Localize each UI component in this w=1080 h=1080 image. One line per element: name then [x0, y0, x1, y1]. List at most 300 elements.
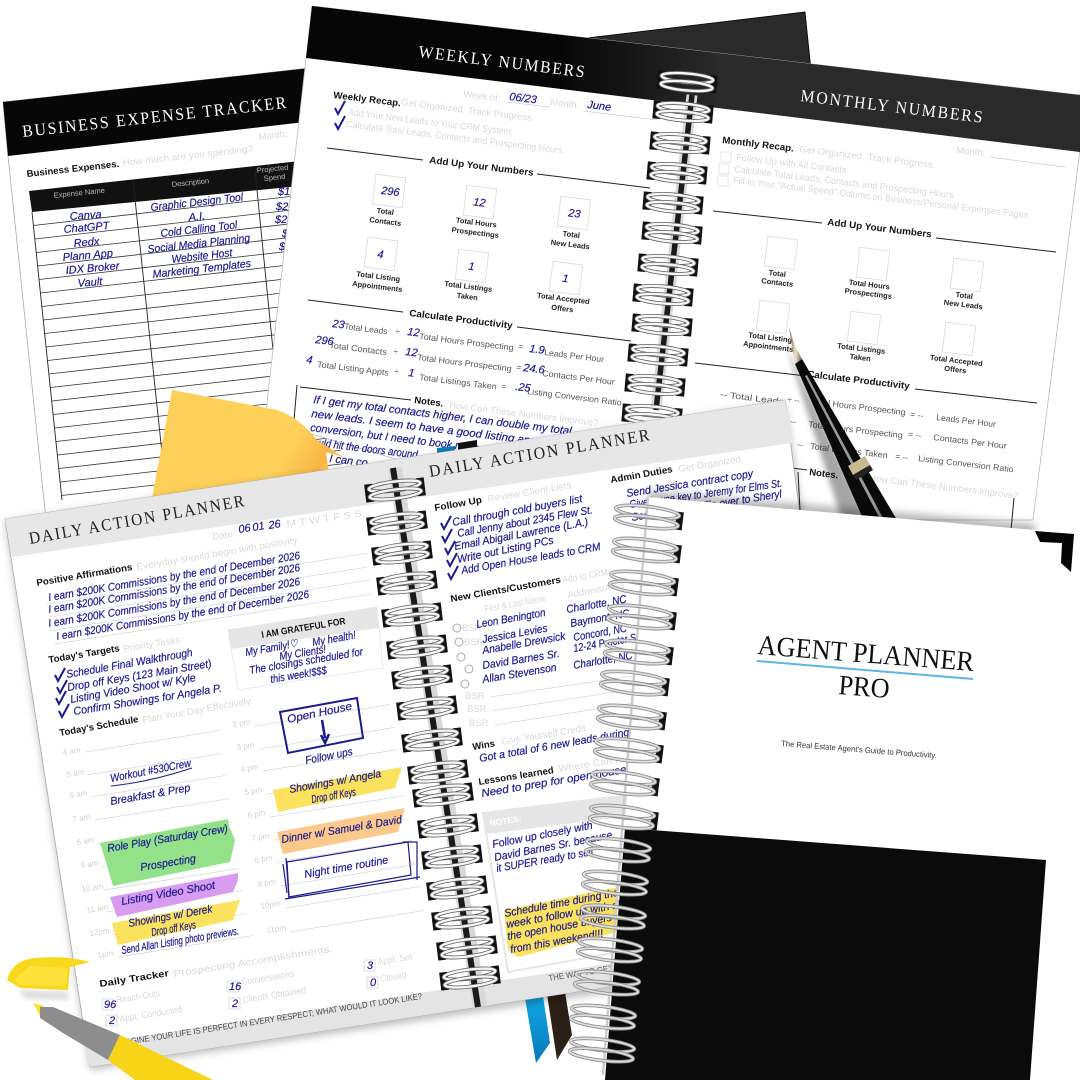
grateful box: My Clients! — [279, 644, 327, 663]
panel: cover — [569, 491, 1080, 1080]
monthly calculate productivity: Total Hours Prospecting — [811, 396, 907, 417]
weekly calculate productivity: Contacts Per Hour — [542, 368, 616, 387]
todays targets: Schedule Final Walkthrough — [65, 647, 194, 681]
monthly add up your numbers: Contacts — [761, 276, 794, 289]
date row: 26 — [267, 518, 282, 532]
todays targets: Priority Tasks. — [123, 634, 184, 655]
weekly calculate productivity: = — [518, 341, 524, 352]
new clients: Jessica Levies — [481, 623, 549, 646]
weekly notes: could hit the doors around — [308, 436, 419, 461]
todays schedule: 9 am — [80, 858, 99, 870]
date row: 06 — [238, 522, 252, 536]
monthly add up your numbers: Total — [955, 290, 973, 301]
weekly add up your numbers: 23 — [567, 207, 582, 221]
todays schedule: 7 pm — [251, 831, 270, 843]
todays targets: Drop off Keys (123 Main Street) — [67, 658, 213, 694]
monthly add up your numbers: Total Hours — [848, 278, 890, 291]
monthly calculate productivity: -- — [790, 416, 797, 427]
notes box: from this weekend!!! — [509, 928, 604, 956]
todays schedule: Showings w/ Derek — [127, 903, 214, 930]
monthly calculate productivity: -- — [797, 439, 804, 450]
daily tracker: 96 — [104, 999, 117, 1011]
table: $20 — [275, 201, 295, 213]
positive affirmations: I earn $200K Commissions by the end of December 2026 — [48, 550, 302, 604]
todays schedule: Breakfast & Prep — [109, 782, 191, 808]
new clients: Charlotte, NC — [565, 594, 628, 616]
weekly calculate productivity: Total Hours Prospecting — [419, 331, 515, 353]
table: Graphic Design Tool — [150, 191, 244, 214]
monthly add up your numbers: Add Up Your Numbers — [827, 217, 932, 240]
weekly calculate productivity: = — [516, 362, 522, 373]
notes box — [483, 795, 630, 983]
todays schedule: Follow ups — [304, 746, 354, 767]
todays schedule: Today's Schedule — [59, 714, 139, 739]
daily tracker: Conversations — [241, 969, 295, 988]
back sheet behind spread — [570, 12, 811, 70]
monthly calculate productivity: = -- — [895, 451, 909, 463]
grateful box: I AM GRATEFUL FOR — [261, 616, 346, 641]
new clients: Add to CRM — [562, 567, 609, 586]
wins and lessons: Give Yourself Credit. — [501, 723, 589, 748]
weekly add up your numbers: Add Up Your Numbers — [429, 155, 534, 179]
cover title: AGENT PLANNER — [756, 630, 976, 678]
monthly calculate productivity: Leads Per Hour — [936, 412, 997, 429]
weekly calculate productivity: Total Listing Appts — [317, 359, 389, 378]
table: $5 — [281, 228, 295, 240]
table: Expense Name — [53, 186, 105, 200]
table: $20 — [274, 214, 294, 226]
todays schedule: 10 am — [81, 882, 105, 894]
todays schedule: 2 pm — [232, 717, 251, 729]
weekly calculate productivity: 12 — [405, 346, 418, 359]
table: Description — [171, 176, 210, 189]
weekly recap block: Calculate Total Leads, Contacts and Prospecting Hours. — [346, 119, 565, 157]
positive affirmations: I earn $200K Commissions by the end of December 2026 — [48, 562, 302, 616]
footer band — [85, 965, 620, 1067]
notes box: it SUPER ready to sell — [495, 846, 595, 875]
sticky note — [148, 390, 345, 520]
monthly recap block: Get Organized. Track Progress. — [799, 144, 936, 171]
todays schedule: 8 am — [76, 835, 95, 847]
monthly calculate productivity: ÷ -- — [787, 394, 801, 406]
new clients: Leon Benington — [475, 607, 546, 631]
panel: business expense tracker — [3, 68, 342, 520]
monthly calculate productivity: -- Total Leads — [720, 389, 784, 407]
new clients: BSR — [469, 718, 489, 729]
todays schedule: Listing Video Shoot — [120, 879, 217, 908]
weekly calculate productivity: 296 — [314, 334, 335, 348]
new clients: Address/Area — [567, 580, 626, 601]
weekly calculate productivity: Total Listings Taken — [419, 372, 498, 392]
weekly add up your numbers: Prospectings — [451, 225, 499, 240]
weekly notes: new leads. I seem to have a good listing appt — [311, 408, 541, 448]
monthly add up your numbers: Total Accepted — [929, 353, 984, 368]
weekly calculate productivity: Total Hours Prospecting — [417, 352, 513, 374]
monthly add up your numbers: Offers — [944, 364, 967, 375]
weekly calculate productivity: .25 — [515, 381, 532, 395]
icon: arrow — [321, 720, 329, 743]
todays schedule — [59, 696, 424, 960]
follow up list: Call Jenny about 2345 Flew St. — [456, 504, 593, 540]
todays schedule: 9 pm — [257, 877, 276, 889]
ribbon bookmarks — [437, 440, 763, 1063]
spine — [656, 95, 692, 410]
new clients: BSR — [462, 623, 482, 634]
weekly add up your numbers: Offers — [551, 303, 574, 314]
todays targets: Listing Video Shoot w/ Kyle — [69, 672, 197, 706]
table: $9 — [278, 241, 291, 253]
todays schedule: 8 pm — [254, 853, 273, 865]
todays schedule: Role Play (Saturday Crew) — [107, 823, 229, 855]
weekly add up your numbers: Total — [562, 229, 580, 240]
spiral binding: cover — [569, 503, 684, 1064]
monthly calculate productivity: Total Hours Prospecting — [808, 419, 904, 440]
highlighter body — [108, 1035, 213, 1080]
monthly recap block: Month: — [956, 145, 986, 159]
notes box: Follow up closely with — [491, 820, 594, 851]
grateful box: The closings scheduled for — [249, 646, 365, 677]
daily tracker: Clients Obtained — [242, 985, 307, 1006]
todays schedule: 12pm — [89, 926, 110, 938]
heading: weekly numbers: WEEKLY NUMBERS — [418, 42, 588, 82]
admin duties: Get Organized. — [678, 454, 745, 475]
grateful box: this week!$$$ — [270, 665, 328, 686]
positive affirmations: Positive Affirmations — [36, 562, 133, 589]
monthly add up your numbers: Total — [768, 268, 786, 279]
new clients: 12-24 Proctor St — [572, 632, 640, 655]
weekly add up your numbers: 1 — [468, 261, 475, 273]
weekly calculate productivity: ÷ — [393, 346, 399, 357]
weekly recap block: Get Organized. Track Progress. — [401, 97, 535, 124]
cover subtitle word: PRO — [837, 670, 891, 705]
icon: pen — [786, 327, 897, 530]
open house box — [280, 698, 363, 753]
daily tracker: Reach Outs — [116, 988, 161, 1006]
daily tracker: Prospecting Accomplishments. — [173, 944, 333, 980]
month label: Month: — [258, 129, 288, 143]
monthly calculate productivity: = -- — [910, 409, 924, 421]
weekly calculate productivity: 4 — [306, 354, 313, 367]
monthly calculate productivity: Contacts Per Hour — [933, 432, 1008, 451]
weekly add up your numbers: Total Listings — [444, 279, 493, 294]
footer quote: IMAGINE YOUR LIFE IS PERFECT IN EVERY RESPECT; WHAT WOULD IT LOOK LIKE? — [117, 991, 423, 1048]
weekly add up your numbers: Taken — [456, 291, 479, 302]
table: Canva — [69, 209, 102, 223]
new clients: David Barnes Sr. — [482, 648, 561, 672]
daily tracker — [99, 944, 413, 1027]
weekly calculate productivity: 24.6 — [522, 362, 546, 377]
daily tracker: 2 — [108, 1015, 115, 1027]
header band — [3, 68, 310, 156]
notes box: NOTES: — [489, 814, 522, 828]
daily tracker: Appt. Conducted — [119, 1004, 183, 1025]
highlight: green — [100, 819, 235, 886]
todays schedule: 6 pm — [247, 808, 266, 820]
grateful box — [228, 607, 383, 690]
weekly add up your numbers: Total Accepted — [536, 291, 591, 306]
todays schedule: 11pm — [266, 923, 287, 935]
date row: M T W T F S S — [286, 509, 363, 530]
follow up list — [434, 480, 602, 579]
wins and lessons: Need to prep for open house — [481, 764, 627, 800]
positive affirmations: I earn $200K Commissions by the end of December 2026 — [56, 589, 311, 643]
highlight: yellow angela — [273, 767, 402, 812]
icon: highlighter — [7, 957, 213, 1080]
notes box: week to follow up with all — [505, 899, 624, 931]
weekly add up your numbers: 296 — [380, 185, 401, 199]
panel: daily action planner — [5, 400, 802, 1070]
heading: daily action planner right: DAILY ACTION PLANNER — [428, 425, 653, 481]
daily tracker: 0 — [370, 977, 377, 989]
todays targets: Today's Targets — [48, 643, 121, 666]
table: Redx — [73, 236, 100, 250]
daily tracker: Appt. Set — [377, 952, 413, 968]
weekly calculate productivity: Calculate Productivity — [409, 308, 514, 332]
daily tracker: 3 — [367, 960, 374, 972]
table: Cold Calling Tool — [160, 219, 238, 240]
weekly notes — [288, 385, 599, 490]
positive affirmations: Everyday should begin with positivity. — [136, 535, 300, 573]
todays schedule: Showings w/ Angela — [288, 768, 382, 796]
monthly add up your numbers: Prospectings — [844, 286, 892, 301]
weekly notes: If I get my total contacts higher, I can double my total — [313, 394, 573, 438]
monthly calculate productivity: Calculate Productivity — [807, 369, 911, 392]
todays schedule: 11 am — [86, 903, 109, 915]
todays schedule: 10pm — [260, 899, 281, 911]
weekly calculate productivity: 12 — [407, 326, 420, 339]
morning entries: Workout #530Crew — [109, 757, 193, 785]
weekly calculate productivity: ÷ — [395, 326, 401, 337]
todays schedule: 4 am — [62, 745, 81, 757]
weekly calculate productivity: Total Contacts — [329, 340, 388, 357]
daily tracker: 2 — [231, 998, 238, 1010]
monthly notes: How Can These Numbers Improve? — [869, 473, 1019, 502]
todays schedule: 4 pm — [240, 762, 259, 774]
monthly calculate productivity: = -- — [908, 429, 922, 441]
follow up list: Call through cold buyers list — [451, 493, 584, 529]
weekly recap block: Weekly Recap. — [333, 90, 401, 109]
weekly add up your numbers: 4 — [377, 249, 384, 261]
weekly recap block — [333, 89, 658, 157]
wins and lessons: Wins — [472, 738, 496, 753]
weekly calculate productivity: 1 — [408, 367, 415, 380]
highlighter nib — [33, 1003, 44, 1018]
table: A.I. — [187, 210, 206, 224]
weekly notes: conversion, but I need to book more — [310, 422, 480, 455]
weekly add up your numbers: Appointments — [352, 279, 403, 294]
todays schedule: Drop off Keys — [310, 786, 357, 806]
grateful box: My health! — [311, 629, 357, 649]
follow up list: Email Abigail Lawrence (L.A.) — [453, 516, 590, 553]
highlight: yellow derek — [112, 900, 240, 945]
weekly recap block: Week of: — [463, 89, 501, 105]
panel: weekly and monthly numbers spread — [265, 6, 1080, 530]
weekly recap block: Month: — [550, 97, 580, 112]
cover tagline: The Real Estate Agent's Guide to Productivity. — [781, 739, 937, 760]
wins and lessons: Got a total of 6 new leads during — [478, 727, 631, 765]
monthly notes: Notes. — [809, 467, 839, 481]
follow up list: Write out Listing PCs — [456, 535, 555, 566]
spine — [395, 468, 480, 1007]
admin duties: Send Jessica contract copy — [626, 468, 755, 500]
todays schedule: 3 pm — [236, 740, 255, 752]
todays targets: Confirm Showings for Angela P. — [73, 683, 223, 718]
monthly recap block: Follow Up with All Contacts — [736, 152, 847, 176]
todays schedule: 1pm — [97, 949, 114, 960]
new clients — [450, 567, 640, 729]
weekly notes: How Can These Numbers Improve? — [449, 400, 599, 429]
heading: monthly numbers: MONTHLY NUMBERS — [800, 86, 985, 127]
monthly recap block: Fill In Your "Actual Spend" Column on Business/Personal Expenses Pages — [733, 175, 1029, 221]
positive affirmations: I earn $200K Commissions by the end of December 2026 — [48, 576, 302, 630]
grateful box: My Family!♡ — [244, 638, 300, 659]
workout underline — [111, 768, 192, 786]
monthly add up your numbers: Total Listing — [748, 330, 793, 345]
spiral binding: daily planner — [364, 477, 501, 991]
wins and lessons — [472, 723, 631, 800]
header band — [306, 6, 1080, 152]
highlighter barrel grey — [40, 1007, 120, 1060]
heading: daily action planner left: DAILY ACTION PLANNER — [27, 491, 247, 548]
new clients: Concord, NC — [572, 623, 628, 644]
todays schedule: Plan Your Day Effectively. — [142, 696, 254, 726]
table: ChatGPT — [63, 220, 111, 236]
header band — [5, 400, 792, 557]
new clients: Baymont, NC — [569, 608, 631, 630]
new clients: Anabelle Drewsick — [481, 630, 567, 657]
daily tracker: Daily Tracker — [99, 968, 170, 990]
positive affirmations — [36, 535, 372, 644]
weekly calculate productivity: 1.9 — [529, 343, 545, 357]
admin duties: Give house key to Jeremy for Elms St. — [629, 478, 783, 511]
todays schedule: Open House — [286, 700, 353, 726]
admin duties: Admin Duties — [610, 464, 674, 486]
weekly recap block: 06/23 — [509, 91, 538, 106]
todays schedule: Prospecting — [140, 853, 198, 874]
cover title underline — [757, 661, 973, 679]
weekly add up your numbers: New Leads — [550, 238, 590, 251]
date row: Date: — [212, 529, 236, 543]
highlight: purple — [110, 873, 238, 917]
admin duties — [610, 454, 783, 524]
new clients: BSR — [465, 691, 485, 702]
monthly add up your numbers: Taken — [849, 352, 872, 363]
todays schedule: Send Allan Listing photo previews. — [121, 925, 240, 957]
todays schedule: Drop off Keys — [150, 919, 197, 939]
weekly add up your numbers: Contacts — [369, 215, 402, 228]
table: $12 — [277, 186, 296, 198]
todays schedule: Night time routine — [303, 854, 389, 881]
new clients: Charlotte, NC — [572, 650, 634, 672]
notes box: David Barnes Sr. because — [493, 829, 613, 864]
follow up list: Review Client Lists — [487, 480, 573, 505]
todays schedule: 7 am — [72, 812, 91, 824]
todays schedule: 5 pm — [244, 785, 263, 797]
weekly calculate productivity: Total Leads — [344, 321, 388, 336]
weekly recap block: June — [586, 99, 612, 114]
highlight: orange — [277, 808, 405, 854]
highlighter cap — [7, 957, 90, 990]
night routine box — [283, 842, 420, 899]
wins and lessons: Lessons learned — [478, 765, 555, 788]
cover black lower panel — [605, 828, 1046, 1080]
todays targets — [48, 634, 223, 718]
weekly calculate productivity: ÷ — [394, 366, 400, 377]
spiral binding: weekly spread — [621, 70, 718, 427]
new clients: BSR — [467, 704, 487, 715]
weekly add up your numbers: Total Hours — [455, 216, 497, 229]
wins and lessons: Where Can I — [558, 755, 619, 775]
monthly add up your numbers: Appointments — [743, 339, 794, 354]
highlight: yellow note — [504, 887, 618, 957]
weekly notes: Notes. — [414, 395, 444, 410]
section title: Business Expenses. — [26, 159, 120, 180]
table: Projected — [256, 163, 289, 175]
table: Website Host — [171, 247, 234, 266]
heading: business expense tracker: BUSINESS EXPENSE TRACKER — [21, 93, 289, 141]
weekly add up your numbers — [327, 148, 650, 314]
monthly recap block — [718, 135, 1065, 221]
weekly calculate productivity: Leads Per Hour — [544, 347, 605, 364]
weekly calculate productivity: = — [501, 381, 507, 392]
cover corner tab — [1035, 531, 1074, 572]
weekly add up your numbers: Total Listing — [356, 269, 401, 284]
follow up list: Follow Up — [434, 495, 483, 514]
new clients: Allan Stevenson — [481, 662, 557, 686]
todays schedule: 5 am — [66, 767, 85, 779]
date row — [212, 509, 363, 543]
weekly recap block: Add Your New Leads to Your CRM System. — [348, 107, 514, 138]
date row: 01 — [252, 520, 266, 534]
monthly add up your numbers: Total Listings — [837, 341, 886, 356]
monthly notes — [798, 467, 1019, 530]
admin duties: Send the Buyer file over to Sheryl — [631, 488, 783, 524]
section prompt: How much are you spending? — [122, 144, 254, 169]
table: Spend — [263, 172, 286, 183]
weekly calculate productivity: Listing Conversion Ratio — [527, 386, 623, 408]
weekly add up your numbers: 1 — [562, 273, 569, 285]
monthly add up your numbers: New Leads — [943, 298, 983, 311]
weekly add up your numbers: 12 — [473, 196, 486, 210]
monthly add up your numbers — [713, 211, 1056, 375]
new clients: First & Last Name — [484, 593, 547, 615]
table: Plann App — [62, 248, 113, 264]
monthly calculate productivity: Listing Conversion Ratio — [918, 453, 1015, 474]
table — [29, 161, 342, 500]
notes box: Schedule time during the — [503, 887, 620, 920]
follow up list: Add Open House leads to CRM — [460, 541, 602, 577]
monthly recap block: Monthly Recap. — [722, 135, 794, 155]
new clients: New Clients/Customers — [450, 575, 562, 605]
table: Marketing Templates — [152, 258, 252, 281]
monthly recap block: Calculate Total Leads, Contacts and Prospecting Hours. — [734, 164, 956, 201]
table: Social Media Planning — [147, 232, 251, 256]
notes box: the open house buyers — [506, 912, 613, 943]
weekly calculate productivity — [300, 300, 631, 408]
weekly notes: also I can co — [306, 450, 368, 470]
daily tracker: Closed — [380, 970, 407, 985]
table: IDX Broker — [65, 260, 121, 277]
weekly calculate productivity: 23 — [331, 318, 346, 332]
monthly calculate productivity: Total Listings Taken — [810, 441, 889, 460]
notes box: THE WAY TO GET — [548, 963, 614, 983]
table: Vault — [77, 276, 104, 290]
monthly calculate productivity — [695, 363, 1037, 474]
weekly add up your numbers: Total — [376, 206, 394, 217]
todays schedule: 6 am — [69, 788, 88, 800]
todays schedule: Dinner w/ Samuel & David — [281, 814, 404, 846]
daily tracker: 16 — [229, 981, 242, 993]
